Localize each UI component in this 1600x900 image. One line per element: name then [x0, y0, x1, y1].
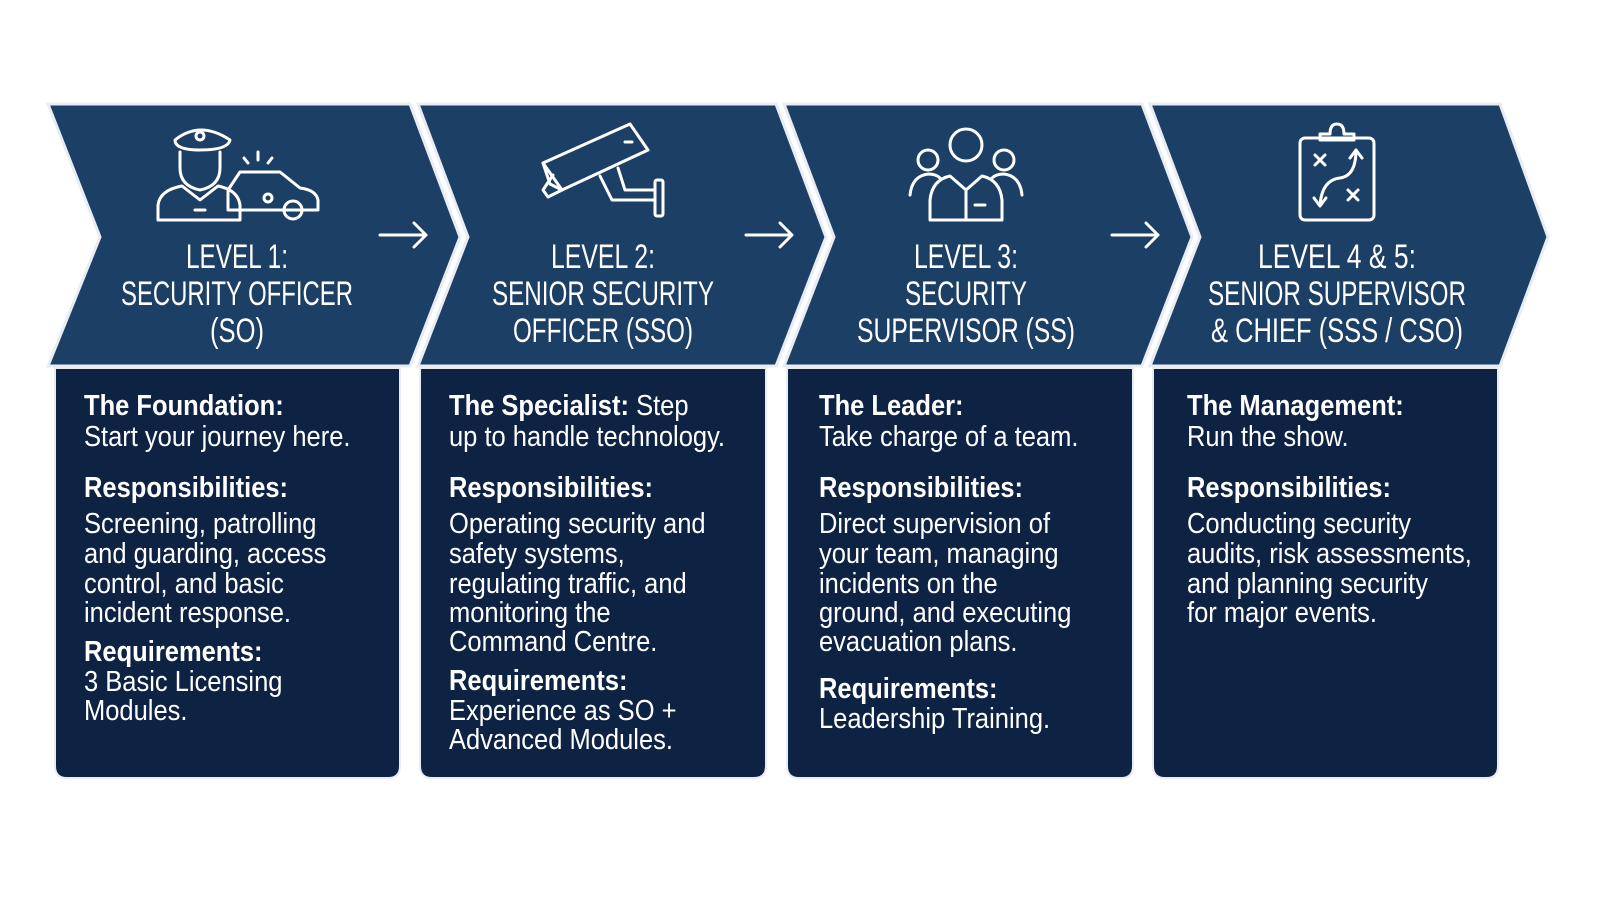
panel: level 3 — [784, 104, 1192, 778]
heading 4: SENIOR SUPERVISOR — [1208, 275, 1466, 313]
chevron header 3 — [784, 104, 1192, 366]
text block 3 — [819, 388, 1078, 734]
text block 3: Direct supervision of — [819, 506, 1050, 539]
heading 3: SUPERVISOR (SS) — [857, 312, 1075, 350]
text block 1: control, and basic — [84, 566, 284, 599]
icon: officer and police car — [158, 130, 318, 220]
body panel 2 — [420, 368, 766, 778]
text block 2: Responsibilities: — [449, 470, 653, 503]
text block 2: Command Centre. — [449, 624, 657, 657]
chevron header 1 — [48, 104, 460, 366]
text block 2: Operating security and — [449, 506, 706, 539]
text block 4 — [1187, 388, 1472, 628]
text block 2: Requirements: — [449, 663, 628, 696]
text block 2: safety systems, — [449, 536, 625, 569]
text block 3: incidents on the — [819, 566, 998, 599]
text block 4: Responsibilities: — [1187, 470, 1391, 503]
heading 3: LEVEL 3: — [914, 238, 1018, 276]
heading 3: SECURITY — [905, 275, 1027, 313]
text block 3: Leadership Training. — [819, 701, 1050, 734]
panel: level 1 — [48, 104, 460, 778]
text block 4: Run the show. — [1187, 419, 1349, 452]
text block 1: and guarding, access — [84, 536, 326, 569]
arrow 3 — [1112, 223, 1158, 247]
arrow 2 — [746, 223, 792, 247]
text block 2: Advanced Modules. — [449, 722, 673, 755]
text block 2: regulating traffic, and — [449, 566, 687, 599]
text block 1 — [84, 388, 351, 726]
text block 2: monitoring the — [449, 595, 611, 628]
text block 1: The Foundation: — [84, 388, 284, 421]
panel: level 4 and 5 — [1150, 104, 1548, 778]
heading 4: & CHIEF (SSS / CSO) — [1211, 312, 1463, 350]
text block 3: your team, managing — [819, 536, 1059, 569]
arrow 1 — [380, 223, 426, 247]
text block 1: 3 Basic Licensing — [84, 664, 282, 697]
icon: cctv camera — [543, 124, 663, 216]
panel: level 2 — [418, 104, 826, 778]
heading 4: LEVEL 4 & 5: — [1258, 238, 1416, 276]
heading 1: (SO) — [210, 312, 264, 350]
heading 3 — [857, 238, 1075, 350]
body panel 1 — [55, 368, 400, 778]
body panel 3 — [787, 368, 1133, 778]
text block 1: Start your journey here. — [84, 419, 351, 452]
text block 2: The Specialist: Step — [449, 388, 689, 421]
chevron header 4 — [1150, 104, 1548, 366]
text block 4: and planning security — [1187, 566, 1428, 599]
text block 2: up to handle technology. — [449, 419, 725, 452]
chevron header 2 — [418, 104, 826, 366]
body panel 4 — [1153, 368, 1498, 778]
text block 3: Responsibilities: — [819, 470, 1023, 503]
icon: team leader — [910, 129, 1022, 220]
heading 2 — [492, 238, 714, 350]
heading 1: LEVEL 1: — [186, 238, 288, 276]
text block 3: Requirements: — [819, 671, 998, 704]
heading 2: OFFICER (SSO) — [513, 312, 693, 350]
text block 1: incident response. — [84, 595, 291, 628]
text block 1: Modules. — [84, 693, 187, 726]
heading 1: SECURITY OFFICER — [121, 275, 353, 313]
heading 1 — [121, 238, 353, 350]
text block 3: evacuation plans. — [819, 624, 1018, 657]
heading 2: SENIOR SECURITY — [492, 275, 714, 313]
text block 2: Experience as SO + — [449, 693, 677, 726]
text block 1: Screening, patrolling — [84, 506, 317, 539]
heading 4 — [1208, 238, 1466, 350]
text block 3: ground, and executing — [819, 595, 1071, 628]
text block 1: Responsibilities: — [84, 470, 288, 503]
text block 4: audits, risk assessments, — [1187, 536, 1472, 569]
text block 3: The Leader: — [819, 388, 964, 421]
text block 1: Requirements: — [84, 634, 263, 667]
text block 4: for major events. — [1187, 595, 1377, 628]
text block 3: Take charge of a team. — [819, 419, 1078, 452]
icon: clipboard plan — [1300, 124, 1374, 220]
text block 4: The Management: — [1187, 388, 1404, 421]
text block 2 — [449, 388, 725, 755]
text block 4: Conducting security — [1187, 506, 1411, 539]
heading 2: LEVEL 2: — [551, 238, 655, 276]
